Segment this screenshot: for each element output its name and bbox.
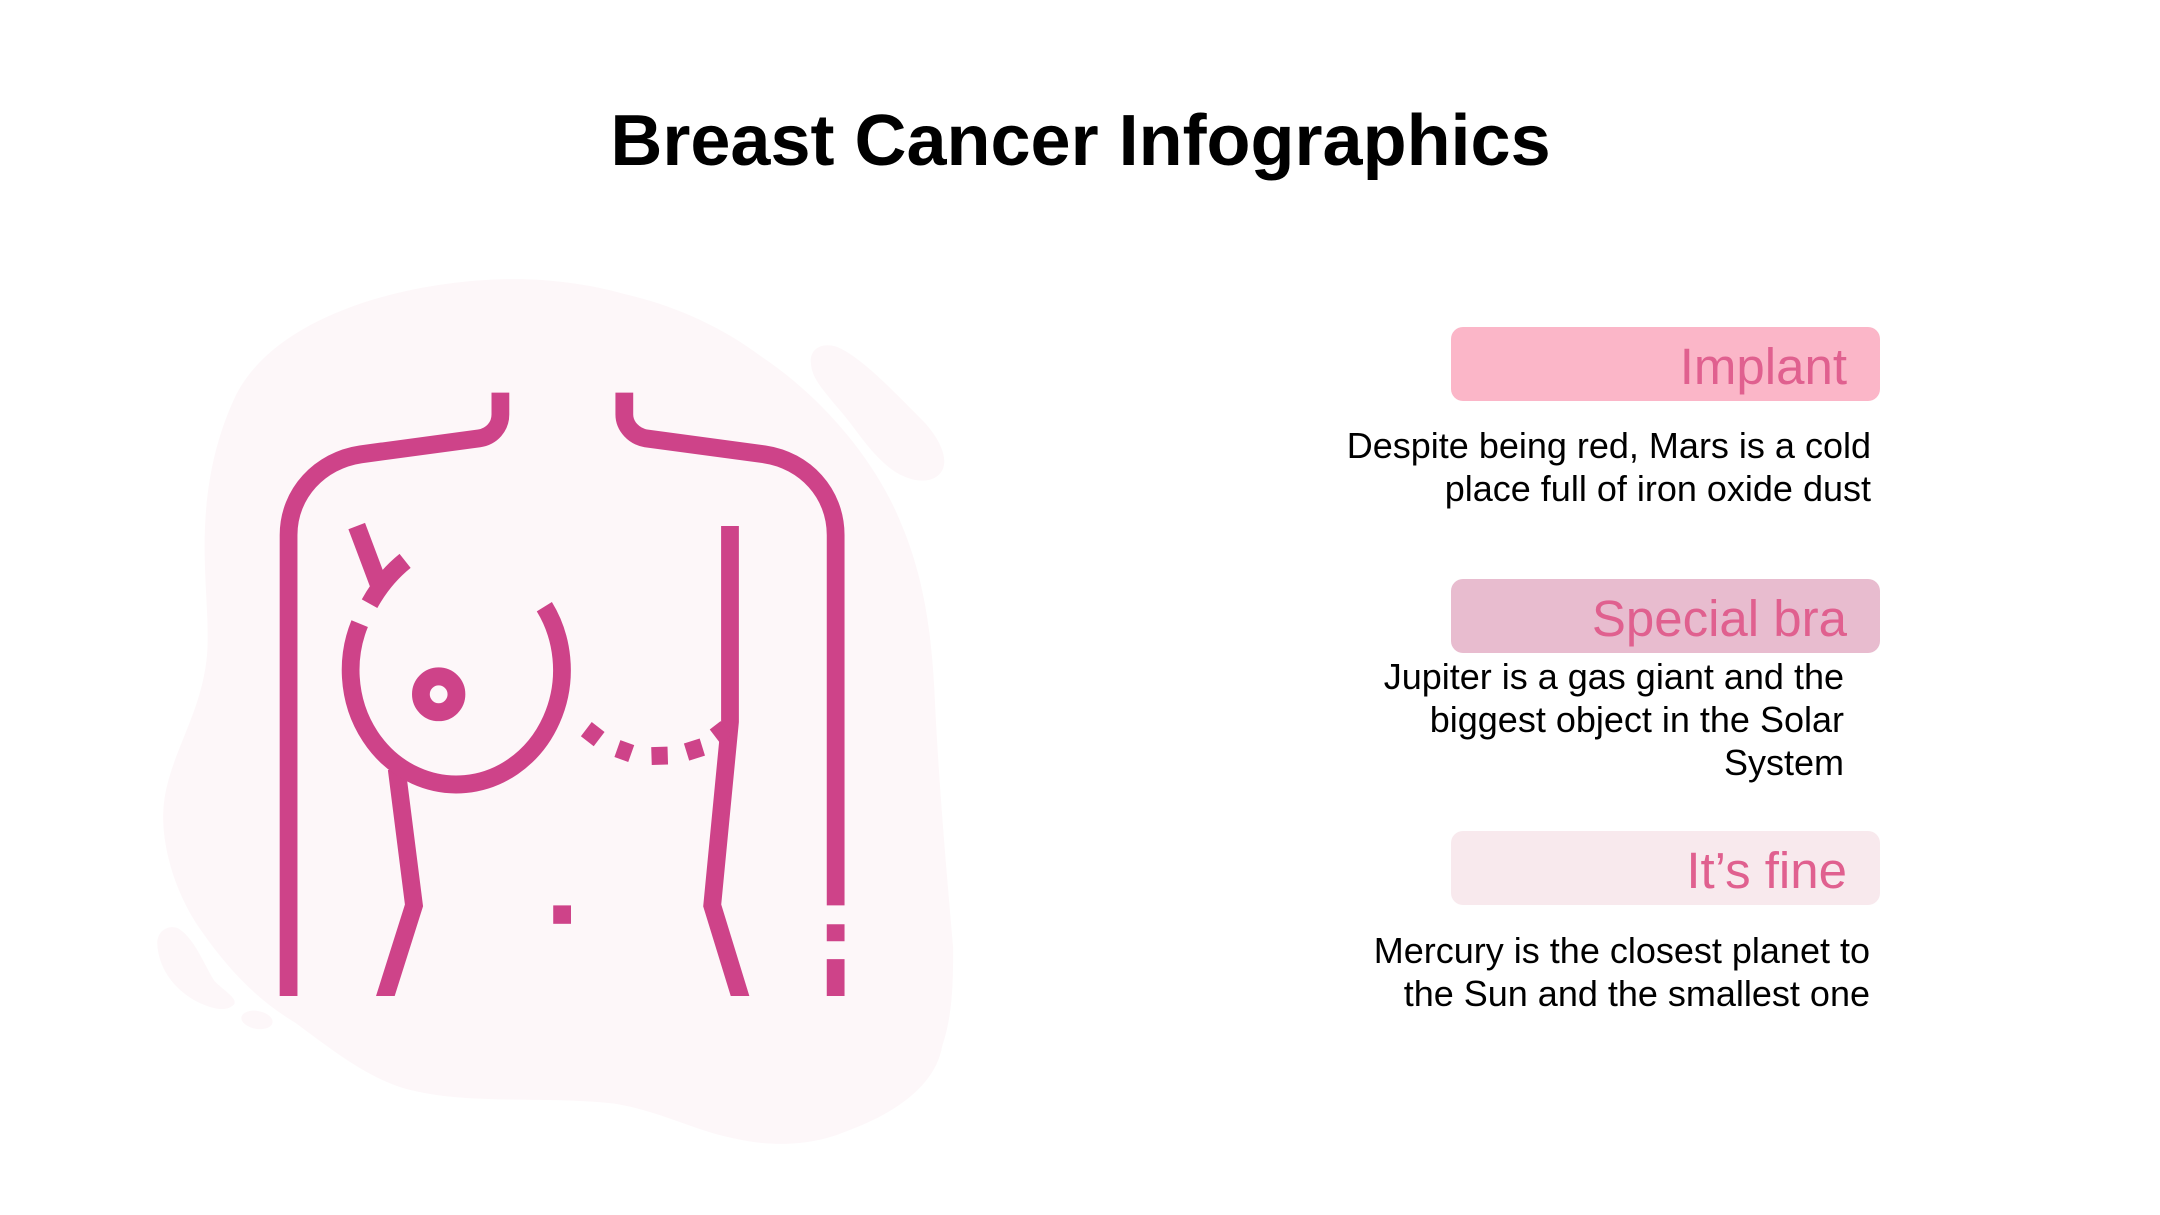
panel: special bra [1451,579,1880,653]
text: it's fine description: the Sun and the smallest one [1404,973,1870,1014]
illustration: torso on blob [280,392,845,996]
text: it's fine description [1374,930,1870,1014]
panel: it's fine: It’s fine [1686,842,1847,899]
navel [553,905,571,924]
title: Breast Cancer Infographics [610,101,1551,181]
text: implant description [1347,425,1871,509]
nipple [421,676,456,712]
breast contour [351,607,562,784]
background blob [157,279,953,1144]
text: implant description: Despite being red, Mars is a cold [1347,425,1871,466]
panel: implant [1451,327,1880,401]
right shoulder and arm [624,393,836,996]
panel: special bra: Special bra [1592,590,1847,647]
text: implant description: place full of iron oxide dust [1445,468,1871,509]
panel: it's fine [1451,831,1880,905]
left shoulder and arm [289,393,500,996]
text: special bra description [1384,656,1844,783]
text: special bra description: biggest object in the Solar [1430,699,1844,740]
left waist [378,769,414,1018]
text: it's fine description: Mercury is the closest planet to [1374,930,1870,971]
text: special bra description: System [1724,742,1844,783]
text: special bra description: Jupiter is a gas giant and the [1384,656,1844,697]
panel: implant: Implant [1680,338,1847,395]
scar dashes [586,728,726,756]
right inner line and waist [712,526,747,1018]
icon: torso outline [289,393,836,1018]
upper contour with incision [357,526,405,604]
